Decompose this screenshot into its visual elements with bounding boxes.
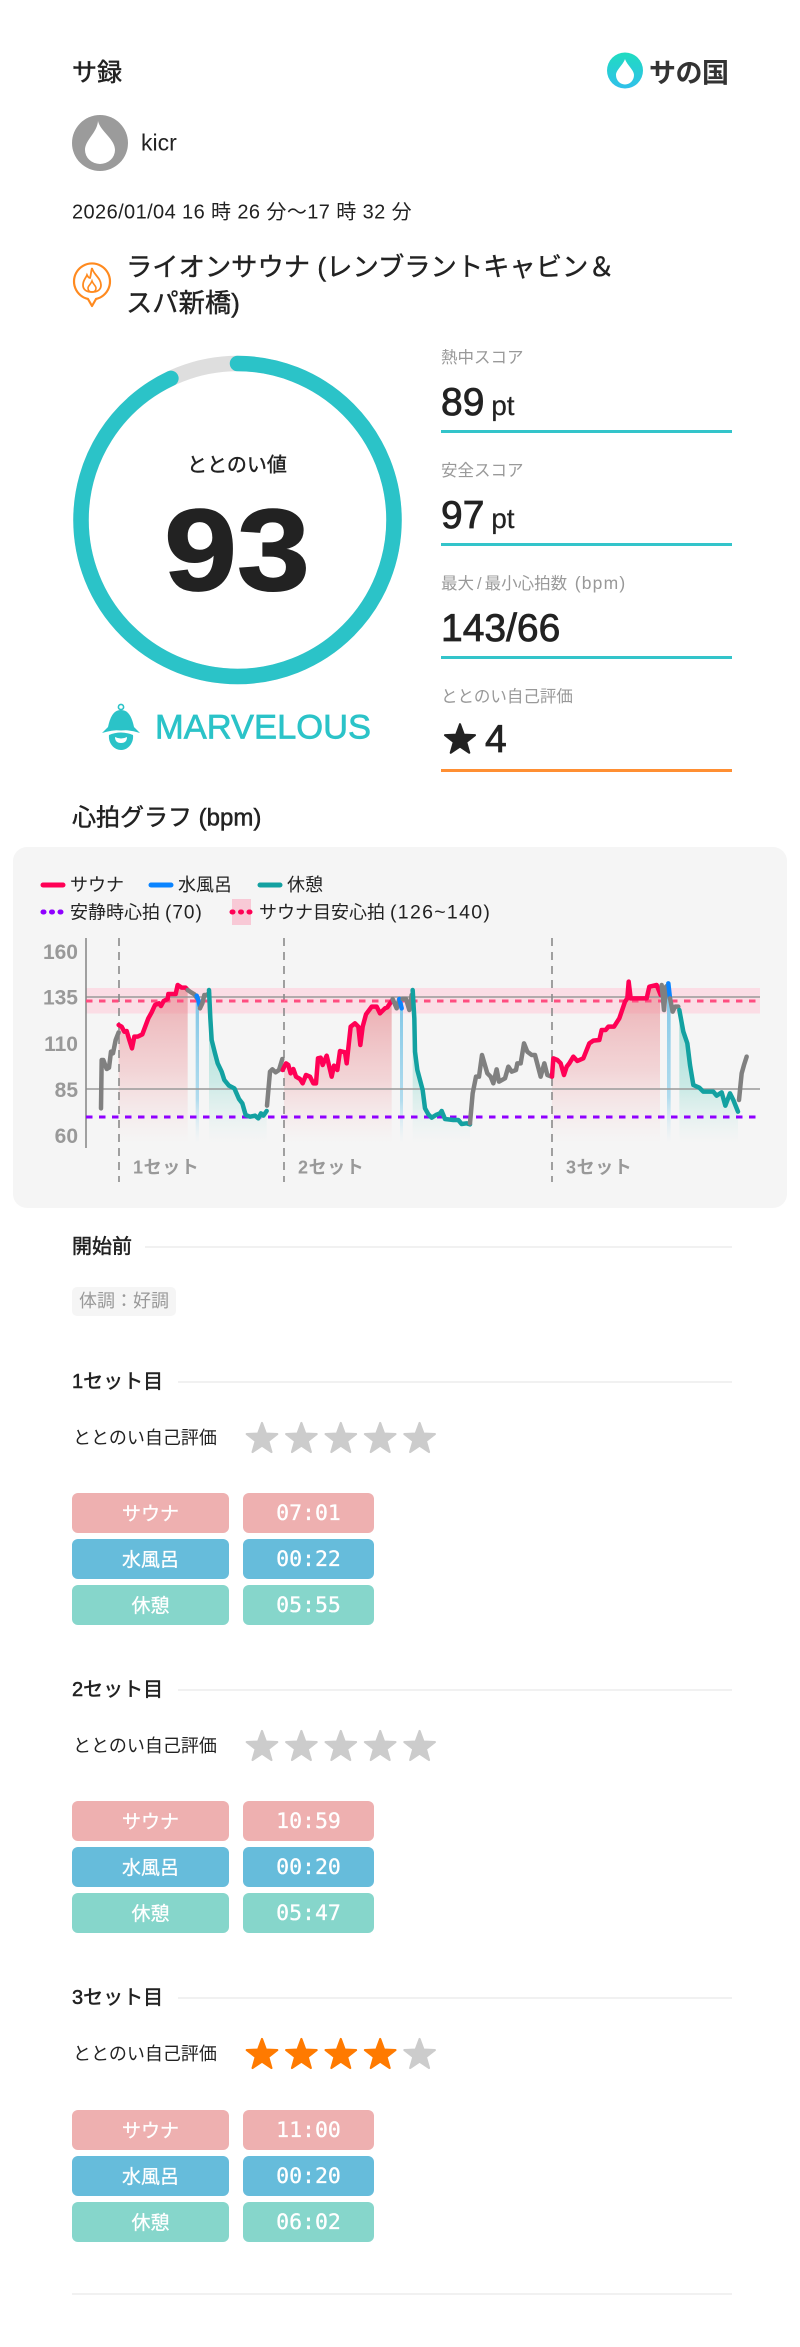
heading: 心拍グラフ: 心拍グラフ (bpm) [72,804,261,832]
legend: target heart rate: サウナ目安心拍 (126~140) [259,902,491,924]
section heading: 2セット目 [72,1679,163,1701]
sauna time: 10:59 [276,1809,341,1834]
condition chip [72,1287,176,1316]
target heart rate band [86,988,760,1014]
sauna time [243,2110,374,2150]
sauna label [72,1801,229,1841]
stat value: 143/66 [441,607,560,650]
section: before start [72,1236,732,1316]
rest label [72,1585,229,1625]
venue name: スパ新橋) [126,288,240,318]
sauna label: サウナ [122,1812,179,1833]
y axis labels: 60 [55,1125,78,1148]
stat: 熱中スコア [441,349,732,433]
stat: 最大/最小心拍数 [441,573,732,659]
set labels [133,1158,632,1178]
cold bath label [72,2156,229,2196]
set 2 fills [284,990,470,1143]
y axis labels: 110 [44,1033,78,1056]
sauna time [243,1493,374,1533]
set 1 fills [119,985,267,1143]
curve: set 2 [283,990,470,1124]
rest time [243,2202,374,2242]
section: set 2 [72,1679,732,1933]
stat: 安全スコア [441,462,732,546]
rating stars: 0 of 5 [246,1422,436,1454]
target heart rate line [86,1000,760,1002]
set separators [119,938,552,1182]
rest label [72,2202,229,2242]
sauna time [243,1801,374,1841]
icon: sauna hat [102,704,140,750]
icon: star [444,723,476,754]
section heading: 開始前 [72,1236,132,1258]
y axis labels: 85 [55,1079,78,1102]
ring label: ととのい値 [187,454,287,476]
legend: rest [260,875,323,895]
rank text: MARVELOUS [155,708,371,746]
rest time: 05:55 [276,1593,341,1618]
curve: recovery before set 3 [470,1043,552,1123]
heart rate curve [101,982,747,1124]
rank badge [102,704,371,750]
section: set 3 [72,1987,732,2242]
section heading: 1セット目 [72,1371,163,1393]
cold bath time [243,1847,374,1887]
set labels: 3セット [566,1158,632,1178]
sauna label: サウナ [122,2121,179,2142]
date and time: 2026/01/04 16 時 26 分～17 時 32 分 [72,202,412,224]
rest time [243,1893,374,1933]
set labels: 2セット [298,1158,364,1178]
rating label: ととのい自己評価 [73,1428,217,1448]
section: set 1 [72,1371,732,1625]
set 3 fills [552,982,738,1143]
stat value: 4 [485,718,507,761]
rating label: ととのい自己評価 [73,1736,217,1756]
legend: rest: 休憩 [287,875,323,895]
cold bath time [243,2156,374,2196]
rest time: 05:47 [276,1901,341,1926]
stat value: 97 pt [441,494,515,537]
legend: cold bath: 水風呂 [178,875,232,895]
sauna label: サウナ [122,1504,179,1525]
legend: cold bath [151,875,232,895]
stat label: 安全スコア [441,462,524,480]
cold bath time: 00:22 [276,1547,341,1572]
sauna time: 11:00 [276,2118,341,2143]
heading: サ録: サ録 [72,59,122,87]
stat: ととのい自己評価 [441,688,732,772]
curve: set 1 [101,985,282,1118]
score ring [73,356,402,684]
rest label: 休憩 [131,1596,170,1617]
set labels: 1セット [133,1158,199,1178]
rest time [243,1585,374,1625]
y axis labels: 135 [43,986,78,1010]
cold bath label: 水風呂 [122,1858,179,1879]
venue name: ライオンサウナ (レンブラントキャビン＆ [126,252,615,282]
rest label [72,1893,229,1933]
condition chip: 体調：好調 [79,1291,169,1311]
icon: logo water drop [607,52,643,88]
sauna time: 07:01 [276,1501,341,1526]
legend [43,875,491,925]
legend: sauna: サウナ [70,875,124,895]
sauna label [72,1493,229,1533]
ring value 93: 93 [164,485,310,615]
session fill areas [119,982,738,1143]
sauna label [72,2110,229,2150]
cold bath label: 水風呂 [122,1550,179,1571]
rating stars: 0 of 5 [246,1730,436,1762]
grid lines [86,997,760,1089]
stat label: 熱中スコア [441,349,524,367]
legend: sauna [43,875,124,895]
logo wordmark: サの国 [649,58,728,88]
cold bath time: 00:20 [276,2164,341,2189]
rating label: ととのい自己評価 [73,2044,217,2064]
cold bath time: 00:20 [276,1855,341,1880]
stat label: 最大/最小心拍数 (bpm) [441,573,626,593]
user name: kicr [141,130,177,156]
cold bath label [72,1539,229,1579]
y axis labels: 160 [43,941,78,964]
y axis [85,938,87,1148]
cold bath label: 水風呂 [122,2167,179,2188]
rest label: 休憩 [131,2213,170,2234]
curve: set 3 [552,982,747,1112]
cold bath label [72,1847,229,1887]
rest time: 06:02 [276,2210,341,2235]
rating stars: 4 of 5 [246,2038,436,2070]
section heading: 3セット目 [72,1987,163,2009]
icon: orange flame pin [72,262,112,308]
panel: heart rate chart [13,847,787,1208]
avatar [72,115,128,171]
venue name [126,252,615,318]
y axis labels [43,941,78,1148]
stat value: 89 pt [441,381,515,424]
logo: サの国 [607,52,728,88]
stat label: ととのい自己評価 [441,688,573,706]
legend: resting heart rate: 安静時心拍 (70) [70,902,203,924]
cold bath time [243,1539,374,1579]
resting heart rate line [86,1116,760,1118]
rest label: 休憩 [131,1904,170,1925]
